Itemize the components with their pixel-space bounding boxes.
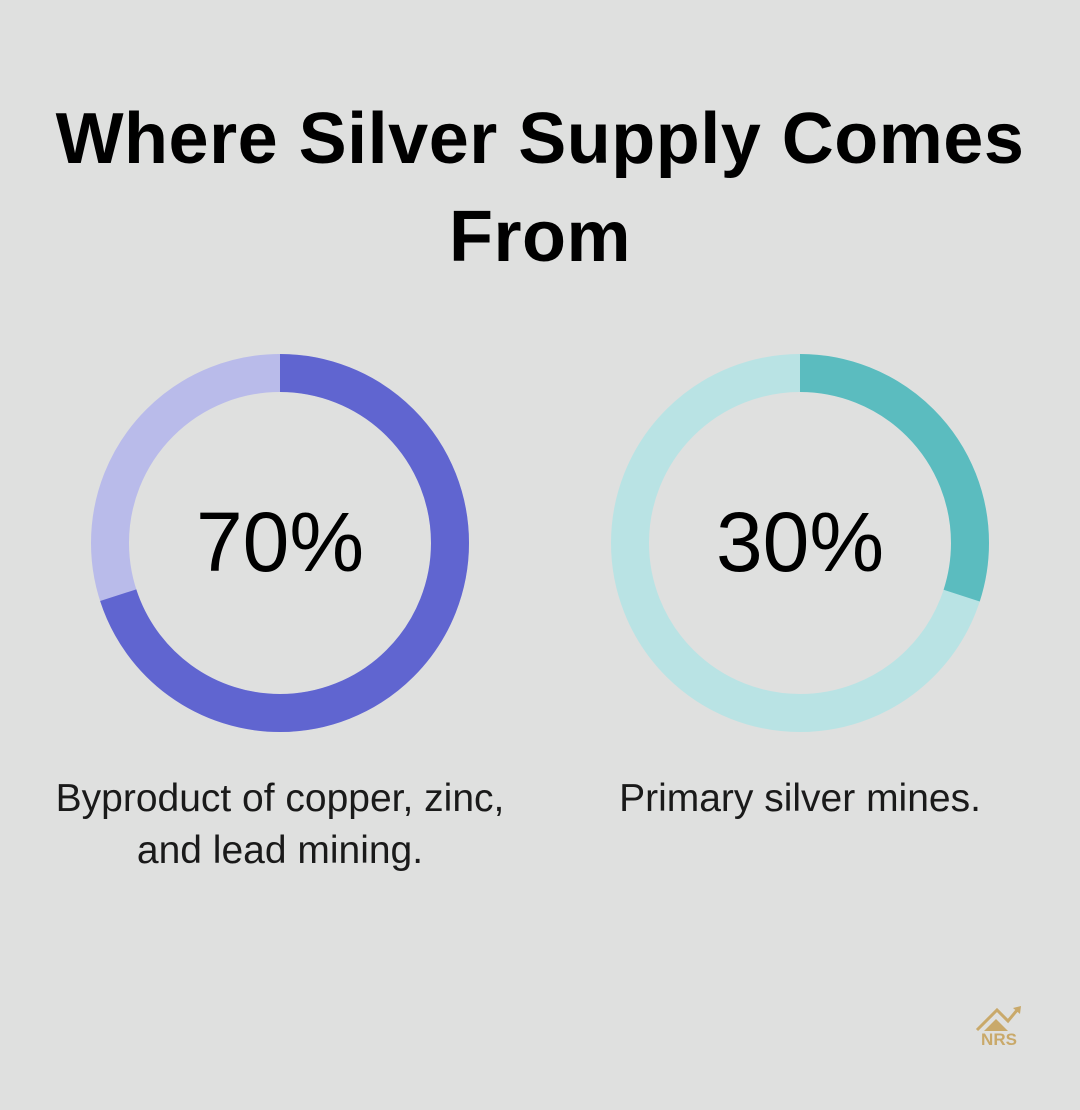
donut: 70%: 70% — [196, 495, 364, 589]
icon: NRS logo — [977, 1006, 1021, 1049]
caption right: Primary silver mines. — [619, 777, 981, 820]
caption left: Byproduct of copper, zinc, — [56, 777, 504, 820]
donut: 30% — [630, 373, 970, 713]
icon: NRS logo: NRS — [981, 1030, 1017, 1049]
donut: 30%: 30% — [716, 495, 884, 589]
caption left: and lead mining. — [137, 829, 423, 872]
title: From — [449, 197, 631, 277]
title: Where Silver Supply Comes — [56, 99, 1024, 179]
donut: 70% — [110, 373, 450, 713]
title — [56, 99, 1024, 277]
caption left — [56, 777, 504, 872]
